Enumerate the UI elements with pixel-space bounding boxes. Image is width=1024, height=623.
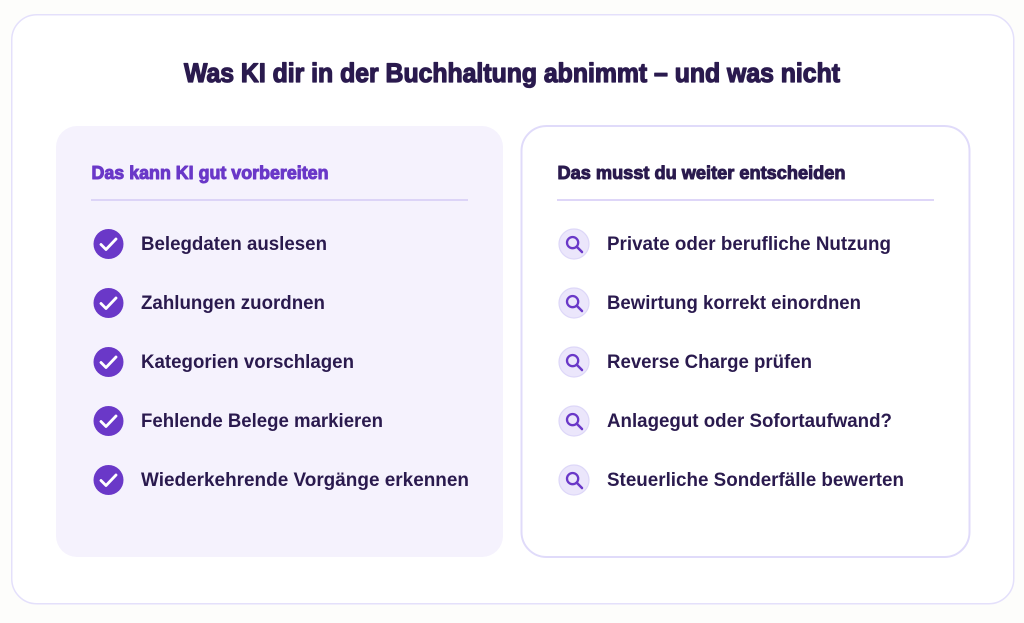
list item: Kategorien vorschlagen <box>94 347 354 377</box>
panel: Das kann KI gut vorbereiten <box>56 126 503 557</box>
right panel heading: Das musst du weiter entscheiden <box>558 162 846 183</box>
list item: Reverse Charge prüfen <box>559 347 812 377</box>
list item: Anlagegut oder Sofortaufwand? <box>559 406 892 436</box>
panel: Das musst du weiter entscheiden <box>522 126 970 557</box>
title: Was KI dir in der Buchhaltung abnimmt – und was nicht <box>184 58 840 88</box>
list item: Bewirtung korrekt einordnen <box>559 288 861 318</box>
list item: Fehlende Belege markieren <box>94 406 383 436</box>
list item: Anlagegut oder Sofortaufwand?: Anlagegut oder Sofortaufwand? <box>607 411 892 432</box>
list item: Private oder berufliche Nutzung <box>559 229 891 259</box>
list item: Wiederkehrende Vorgänge erkennen <box>94 465 469 495</box>
list item: Zahlungen zuordnen: Zahlungen zuordnen <box>141 293 325 314</box>
list item: Fehlende Belege markieren: Fehlende Belege markieren <box>141 411 383 432</box>
list item: Reverse Charge prüfen: Reverse Charge prüfen <box>607 352 812 373</box>
list item: Bewirtung korrekt einordnen: Bewirtung korrekt einordnen <box>607 293 861 314</box>
left panel heading: Das kann KI gut vorbereiten <box>92 162 328 183</box>
list item: Wiederkehrende Vorgänge erkennen: Wiederkehrende Vorgänge erkennen <box>141 470 469 491</box>
list item: Belegdaten auslesen <box>94 229 327 259</box>
list item: Steuerliche Sonderfälle bewerten: Steuerliche Sonderfälle bewerten <box>607 470 904 491</box>
list item: Belegdaten auslesen: Belegdaten auslesen <box>141 234 327 255</box>
list item: Private oder berufliche Nutzung: Private oder berufliche Nutzung <box>607 234 891 255</box>
list item: Steuerliche Sonderfälle bewerten <box>559 465 904 495</box>
list item: Kategorien vorschlagen: Kategorien vorschlagen <box>141 352 354 373</box>
list item: Zahlungen zuordnen <box>94 288 325 318</box>
